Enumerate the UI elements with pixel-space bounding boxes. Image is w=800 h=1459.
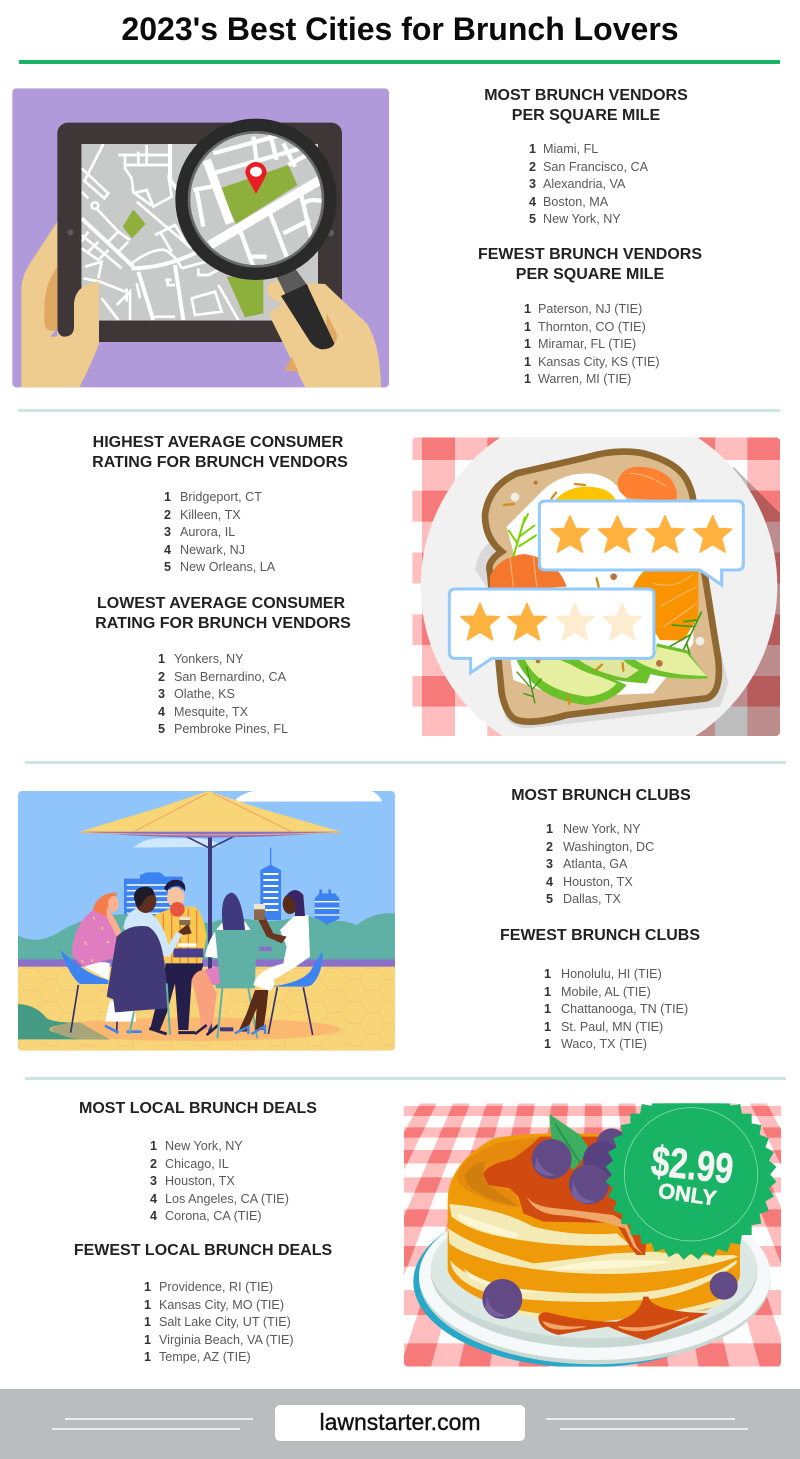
list: most clubs: 2 [546,840,553,854]
list: most vendors: 1 [529,142,536,156]
illustration: avocado toast with star ratings [412,437,780,736]
text block: fewest vendors: FEWEST BRUNCH VENDORS [478,246,702,263]
text block: most vendors [484,87,688,124]
list: fewest clubs: Chattanooga, TN (TIE) [561,1002,688,1016]
list: fewest clubs: 1 [544,985,551,999]
rating bubble: four stars [539,501,743,585]
list: fewest deals [144,1280,294,1364]
list: most clubs: Houston, TX [563,875,633,889]
list: fewest clubs: St. Paul, MN (TIE) [561,1020,663,1034]
person: man in striped shirt [149,880,207,1034]
person: man in blue shirt with jacket [107,887,182,1035]
footer url: lawnstarter.com [319,1409,481,1435]
list: lowest rating: 4 [158,705,165,719]
list: lowest rating: Mesquite, TX [174,705,248,719]
list: highest rating: 2 [164,508,171,522]
list: fewest vendors: Warren, MI (TIE) [538,372,631,386]
list: highest rating: 5 [164,560,171,574]
list: most clubs: Dallas, TX [563,892,621,906]
list: highest rating: 1 [164,490,171,504]
list: highest rating: 4 [164,543,171,557]
left hand [21,222,99,387]
salmon [617,467,677,502]
list: fewest deals: Salt Lake City, UT (TIE) [159,1315,291,1329]
list: most vendors: 3 [529,177,536,191]
list: fewest vendors: Thornton, CO (TIE) [538,320,646,334]
umbrella [80,791,341,1032]
price badge [606,1089,776,1260]
list: most clubs: Washington, DC [563,840,654,854]
list: highest rating: Bridgeport, CT [180,490,262,504]
list: most deals: 3 [150,1174,157,1188]
map pin [245,162,267,194]
list: most clubs: 5 [546,892,553,906]
list: fewest vendors: Miramar, FL (TIE) [538,337,636,351]
list: most deals: 1 [150,1139,157,1153]
list: most deals: Chicago, IL [165,1157,229,1171]
list: fewest clubs [544,967,688,1051]
list: fewest deals: 1 [144,1333,151,1347]
list: most deals: 2 [150,1157,157,1171]
list: most vendors: San Francisco, CA [543,160,648,174]
list: lowest rating [158,652,288,736]
toast [475,477,728,728]
text block: most vendors: MOST BRUNCH VENDORS [484,87,688,104]
list: fewest deals: Providence, RI (TIE) [159,1280,273,1294]
list: fewest deals: Tempe, AZ (TIE) [159,1350,251,1364]
person: woman in pink shirt [60,893,142,1033]
list: most clubs: New York, NY [563,822,641,836]
list: lowest rating: Pembroke Pines, FL [174,722,288,736]
footer url [275,1405,525,1441]
table [259,947,272,951]
list: most clubs: 3 [546,857,553,871]
footer band [0,1389,800,1459]
list: most vendors: 2 [529,160,536,174]
title: 2023's Best Cities for Brunch Lovers [121,11,679,47]
text block: most vendors: PER SQUARE MILE [512,107,660,124]
list: most deals: Corona, CA (TIE) [165,1209,262,1223]
text block: most clubs: MOST BRUNCH CLUBS [511,787,691,804]
list: fewest clubs: 1 [544,1020,551,1034]
person: woman in white dress [235,890,323,1035]
list: most deals: 4 [150,1209,157,1223]
pancake stack [448,1133,740,1322]
egg [507,473,693,697]
magnifier handle [277,268,308,298]
list: most deals: 4 [150,1192,157,1206]
person: woman with long dark hair [192,893,257,1038]
list: fewest clubs: Mobile, AL (TIE) [561,985,651,999]
list: fewest vendors: 1 [524,337,531,351]
text block: fewest deals: FEWEST LOCAL BRUNCH DEALS [74,1242,332,1259]
list: highest rating: 3 [164,525,171,539]
text block: highest rating: RATING FOR BRUNCH VENDORS [92,454,348,471]
list: most vendors: Alexandria, VA [543,177,625,191]
list: fewest vendors: 1 [524,302,531,316]
list: most deals [150,1139,289,1223]
list: highest rating: Newark, NJ [180,543,245,557]
list: most clubs: Atlanta, GA [563,857,627,871]
list: most vendors: Miami, FL [543,142,598,156]
mint leaf [549,1114,590,1170]
list: most vendors: 5 [529,212,536,226]
list: lowest rating: 3 [158,687,165,701]
list: fewest vendors [524,302,660,386]
magnifier lens [175,119,337,280]
skyline [124,872,183,920]
list: fewest deals: 1 [144,1280,151,1294]
text block: highest rating [92,434,348,471]
list: fewest deals: 1 [144,1350,151,1364]
text block: lowest rating [95,595,351,632]
text block: lowest rating: RATING FOR BRUNCH VENDORS [95,615,351,632]
price badge: ONLY [657,1179,718,1211]
list: most clubs: 4 [546,875,553,889]
list: most vendors [529,142,648,226]
list: fewest vendors: Paterson, NJ (TIE) [538,302,642,316]
blueberries [482,1128,738,1319]
list: fewest vendors: Kansas City, KS (TIE) [538,355,660,369]
list: fewest vendors: 1 [524,372,531,386]
list: most clubs: 1 [546,822,553,836]
illustration: pancakes with price badge [404,1103,781,1367]
list: most vendors: Boston, MA [543,195,608,209]
list: lowest rating: San Bernardino, CA [174,670,286,684]
list: most deals: Los Angeles, CA (TIE) [165,1192,289,1206]
list: most deals: New York, NY [165,1139,243,1153]
illustration: friends at brunch table [18,791,395,1051]
text block: highest rating: HIGHEST AVERAGE CONSUMER [93,434,343,451]
text block: fewest vendors [478,246,702,283]
dill [508,513,537,557]
list: highest rating: Killeen, TX [180,508,241,522]
text block: most deals: MOST LOCAL BRUNCH DEALS [79,1100,317,1117]
list: fewest vendors: 1 [524,355,531,369]
price badge: $2.99 [649,1137,736,1193]
list: fewest deals: Virginia Beach, VA (TIE) [159,1333,294,1347]
list: lowest rating: 1 [158,652,165,666]
list: fewest clubs: Waco, TX (TIE) [561,1037,647,1051]
list: fewest deals: 1 [144,1315,151,1329]
list: fewest deals: Kansas City, MO (TIE) [159,1298,284,1312]
list: fewest clubs: 1 [544,1037,551,1051]
list: fewest clubs: 1 [544,1002,551,1016]
list: fewest clubs: Honolulu, HI (TIE) [561,967,662,981]
list: highest rating: New Orleans, LA [180,560,275,574]
list: lowest rating: 5 [158,722,165,736]
list: fewest vendors: 1 [524,320,531,334]
hills [18,913,395,962]
text block: fewest clubs: FEWEST BRUNCH CLUBS [500,927,700,944]
list: highest rating: Aurora, IL [180,525,235,539]
list: lowest rating: 2 [158,670,165,684]
list: most vendors: 4 [529,195,536,209]
list: fewest deals: 1 [144,1298,151,1312]
text block: lowest rating: LOWEST AVERAGE CONSUMER [97,595,345,612]
list: most deals: Houston, TX [165,1174,235,1188]
list: fewest clubs: 1 [544,967,551,981]
text block: fewest vendors: PER SQUARE MILE [516,266,664,283]
plate [413,1230,771,1367]
title underline [19,60,780,64]
list: most vendors: New York, NY [543,212,621,226]
avocado [515,657,627,705]
syrup [483,1137,708,1340]
list: most clubs [546,822,654,906]
list: lowest rating: Olathe, KS [174,687,235,701]
illustration: tablet map with magnifying glass [12,88,389,388]
list: lowest rating: Yonkers, NY [174,652,244,666]
right hand back [267,281,381,387]
list: highest rating [164,490,276,574]
rating bubble: two stars [449,589,654,673]
